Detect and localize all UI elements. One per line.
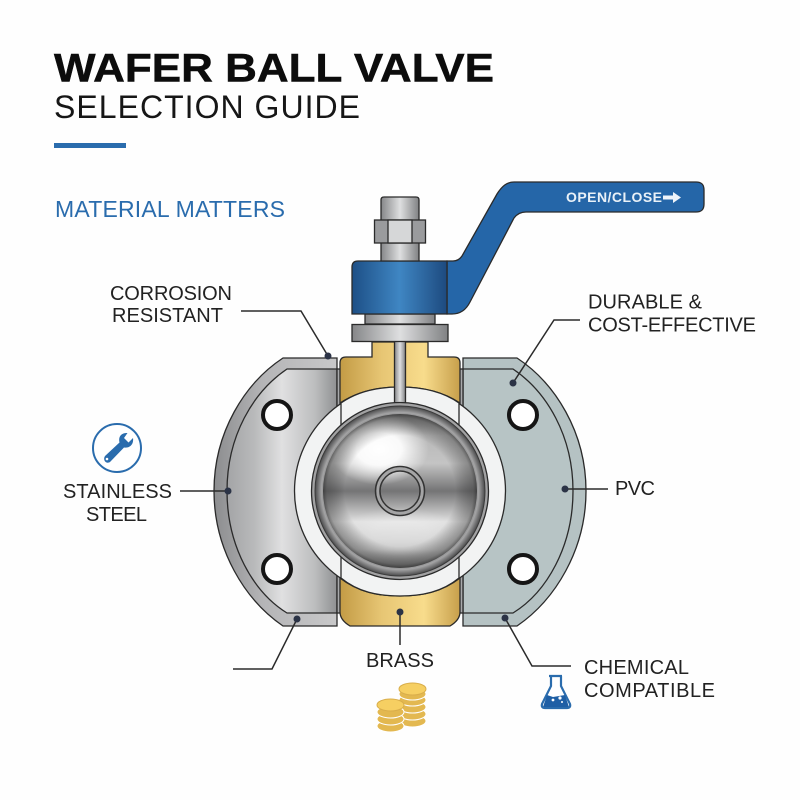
callout: stainless steel: STAINLESS bbox=[63, 481, 172, 503]
callout: durable and cost-effective: COST-EFFECTIVE bbox=[588, 314, 756, 336]
title: WAFER BALL VALVE bbox=[54, 46, 494, 90]
callout: PVC bbox=[562, 478, 655, 500]
white seat ring bbox=[294, 386, 506, 596]
left flange: stainless steel bbox=[214, 358, 337, 626]
callout: PVC: PVC bbox=[615, 478, 655, 500]
brass body bbox=[340, 342, 460, 626]
callout: unlabeled stainless lower leader bbox=[233, 616, 300, 669]
ball port ring bbox=[376, 466, 424, 516]
callout: durable and cost-effective bbox=[510, 292, 756, 386]
handle label: OPEN/CLOSE bbox=[566, 189, 662, 205]
callout: corrosion resistant: CORROSION bbox=[110, 283, 232, 305]
callout: corrosion resistant: RESISTANT bbox=[112, 305, 223, 327]
icon: wrench bbox=[93, 424, 141, 472]
callout: stainless steel: STEEL bbox=[86, 504, 147, 526]
ball bbox=[312, 402, 488, 580]
callout: stainless steel bbox=[63, 481, 232, 526]
stem collar and gland flange bbox=[352, 314, 448, 342]
title: SELECTION GUIDE bbox=[54, 89, 360, 125]
icon: coin stacks bbox=[377, 683, 426, 732]
callout: durable and cost-effective: DURABLE & bbox=[588, 292, 703, 314]
title accent bar bbox=[54, 143, 126, 148]
callout: chemical compatible: CHEMICAL bbox=[584, 657, 689, 679]
callout: chemical compatible bbox=[502, 614, 715, 702]
handle hub bbox=[352, 261, 447, 314]
icon: flask bbox=[542, 676, 570, 708]
callout: brass bbox=[366, 608, 434, 672]
right flange: PVC bbox=[463, 358, 586, 626]
valve diagram bbox=[214, 182, 704, 626]
stem bbox=[394, 341, 406, 407]
section heading: material matters: MATERIAL MATTERS bbox=[55, 196, 285, 222]
flange spacer strips bbox=[337, 369, 463, 613]
callout: brass: BRASS bbox=[366, 650, 434, 672]
bolt and nut bbox=[374, 197, 426, 261]
title bbox=[54, 46, 494, 125]
callout: corrosion resistant bbox=[110, 283, 332, 360]
lever handle bbox=[447, 182, 704, 314]
seat inner panels bbox=[341, 387, 459, 596]
infographic bbox=[54, 54, 756, 732]
callout: chemical compatible: COMPATIBLE bbox=[584, 680, 715, 702]
